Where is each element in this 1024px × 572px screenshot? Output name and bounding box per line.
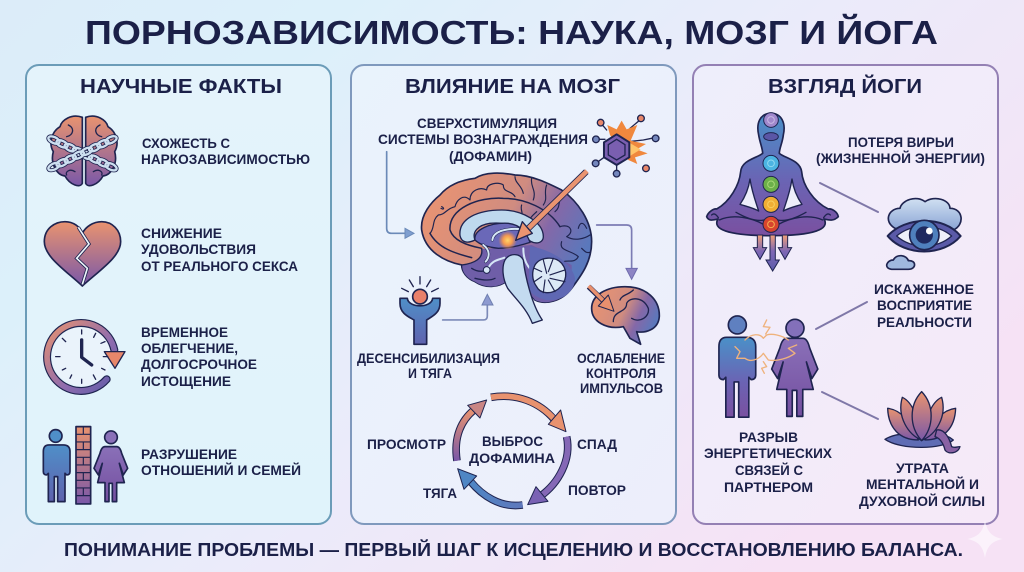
text: addiction similarity: СХОЖЕСТЬ С: [142, 136, 230, 151]
text: addiction similarity: НАРКОЗАВИСИМОСТЬЮ: [141, 152, 310, 167]
text: desensitization: ДЕСЕНСИБИЛИЗАЦИЯ: [357, 351, 500, 366]
text: temporary relief: ОБЛЕГЧЕНИЕ,: [141, 341, 238, 356]
text: distorted perception: РЕАЛЬНОСТИ: [877, 315, 972, 330]
text: desensitization: [357, 351, 500, 381]
text: broken energy ties: [704, 430, 832, 495]
cycle centre label: ДОФАМИНА: [469, 451, 555, 466]
text: loss of mental strength: ДУХОВНОЙ СИЛЫ: [859, 494, 985, 509]
cycle arrows: [456, 396, 568, 506]
text: reduced pleasure: СНИЖЕНИЕ: [141, 226, 222, 241]
text: addiction similarity: [141, 136, 310, 167]
arrow: orange into reward centre: [516, 171, 587, 240]
diagram: dopamine cycle: [367, 396, 626, 506]
text: weakened impulse control: ОСЛАБЛЕНИЕ: [577, 351, 665, 366]
arrow: receptor to brain: [443, 294, 493, 320]
cycle centre label: [469, 434, 555, 466]
text: temporary relief: ВРЕМЕННОЕ: [141, 325, 228, 340]
text: reduced pleasure: [141, 226, 298, 274]
panel frame: facts: [26, 65, 331, 524]
icon: wilted lotus: [885, 392, 960, 453]
icon: meditating figure with chakras: [707, 113, 838, 271]
text: weakened impulse control: ИМПУЛЬСОВ: [580, 381, 663, 396]
cycle label: drop: СПАД: [577, 437, 617, 452]
text: destroyed relationships: ОТНОШЕНИЙ И СЕМЕЙ: [141, 463, 301, 478]
text: weakened impulse control: КОНТРОЛЯ: [586, 366, 656, 381]
text: reward overstimulation: СИСТЕМЫ ВОЗНАГРАЖДЕНИЯ: [378, 132, 588, 147]
illustration: brain cross-section: [422, 173, 592, 323]
heading: facts: НАУЧНЫЕ ФАКТЫ: [80, 76, 282, 98]
cycle label: watching: ПРОСМОТР: [367, 437, 446, 452]
watermark sparkle: [967, 520, 1003, 558]
text: reward overstimulation: СВЕРХСТИМУЛЯЦИЯ: [417, 116, 557, 131]
text: temporary relief: [141, 325, 257, 389]
text: reward overstimulation: (ДОФАМИН): [449, 149, 532, 164]
icon: couple separated by brick wall: [43, 427, 128, 504]
panel: yoga view: [693, 65, 998, 524]
arrow: brain to impulse control: [597, 225, 637, 279]
text: distorted perception: ИСКАЖЕННОЕ: [874, 282, 974, 297]
text: broken energy ties: ЭНЕРГЕТИЧЕСКИХ: [704, 446, 832, 461]
panel: brain impact: [351, 65, 676, 524]
panel frame: yoga: [693, 65, 998, 524]
cycle label: repeat: ПОВТОР: [568, 483, 626, 498]
footer message: ПОНИМАНИЕ ПРОБЛЕМЫ — ПЕРВЫЙ ШАГ К ИСЦЕЛЕНИЮ И ВОССТАНОВЛЕНИЮ БАЛАНСА.: [64, 539, 963, 560]
text: reduced pleasure: УДОВОЛЬСТВИЯ: [141, 242, 256, 257]
icon: small brain with arrow: [589, 286, 659, 344]
heading: yoga: ВЗГЛЯД ЙОГИ: [768, 74, 922, 98]
text: broken energy ties: ПАРТНЕРОМ: [724, 480, 813, 495]
text: weakened impulse control: [577, 351, 665, 396]
panel frame: brain: [351, 65, 676, 524]
text: distorted perception: ВОСПРИЯТИЕ: [877, 298, 972, 313]
icon: dopamine molecule: [592, 115, 659, 177]
text: reduced pleasure: ОТ РЕАЛЬНОГО СЕКСА: [141, 259, 298, 274]
text: loss of virya: ПОТЕРЯ ВИРЬИ: [848, 135, 954, 150]
arrow: label to brain: [387, 152, 414, 238]
cycle centre label: ВЫБРОС: [482, 434, 543, 449]
text: loss of virya: (ЖИЗНЕННОЙ ЭНЕРГИИ): [816, 151, 985, 166]
text: desensitization: И ТЯГА: [408, 366, 452, 381]
text: destroyed relationships: [141, 447, 301, 478]
text: temporary relief: ДОЛГОСРОЧНОЕ: [141, 357, 257, 372]
heading: brain: ВЛИЯНИЕ НА МОЗГ: [405, 76, 620, 98]
connector: figure to eye: [820, 183, 878, 212]
icon: eye with clouds: [887, 199, 961, 269]
cycle label: craving: ТЯГА: [423, 486, 457, 501]
icon: broken heart: [44, 222, 121, 286]
text: temporary relief: ИСТОЩЕНИЕ: [141, 374, 231, 389]
text: loss of mental strength: МЕНТАЛЬНОЙ И: [866, 477, 979, 492]
icon: clock with arrow: [47, 323, 125, 391]
icon: couple with broken energy ties: [719, 316, 818, 417]
text: broken energy ties: СВЯЗЕЙ С: [735, 463, 803, 478]
connector: couple to eye: [816, 302, 867, 329]
title: ПОРНОЗАВИСИМОСТЬ: НАУКА, МОЗГ И ЙОГА: [85, 13, 938, 51]
text: destroyed relationships: РАЗРУШЕНИЕ: [141, 447, 237, 462]
text: loss of virya: [816, 135, 985, 166]
text: loss of mental strength: УТРАТА: [896, 461, 949, 476]
connector: couple to lotus: [822, 392, 878, 419]
icon: receptor: [400, 277, 440, 344]
panel: scientific facts: [26, 65, 331, 524]
text: reward overstimulation: [378, 116, 588, 164]
text: distorted perception: [874, 282, 974, 330]
text: loss of mental strength: [859, 461, 985, 509]
icon: chained brain: [47, 116, 118, 186]
text: broken energy ties: РАЗРЫВ: [739, 430, 798, 445]
